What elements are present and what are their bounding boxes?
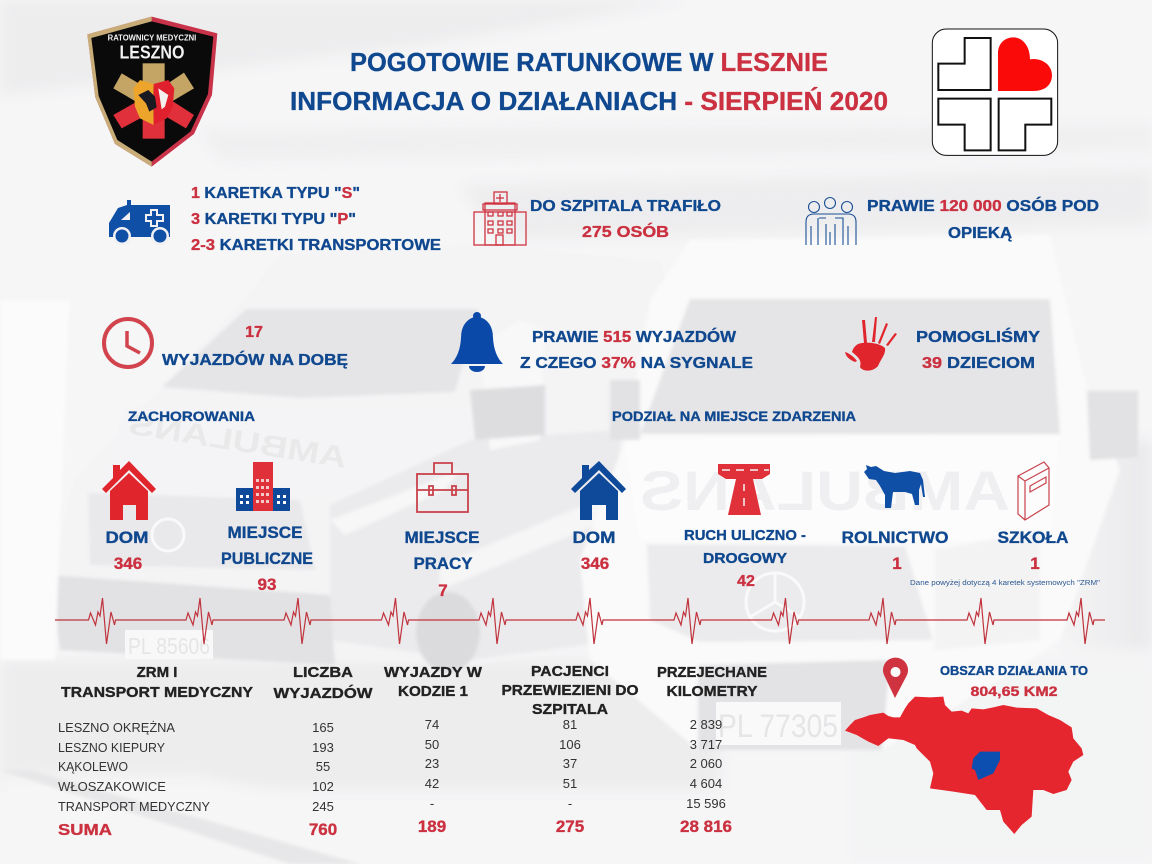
logo: Ratownicy Medyczni Leszno shield: LESZNO bbox=[119, 42, 184, 63]
stat: rolnictwo 1: 1 bbox=[892, 554, 902, 573]
column: wyjazdy w kodzie 1: 74 bbox=[425, 717, 439, 732]
logo: emergency cross with heart bbox=[932, 29, 1058, 155]
stat: dom 346 bbox=[106, 528, 148, 573]
total trips text: Z CZEGO 37% NA SYGNALE bbox=[520, 355, 753, 372]
service area text bbox=[940, 663, 1088, 699]
children helped text bbox=[916, 327, 1040, 372]
background photo: ambulances in a garage: AMBULANS bbox=[640, 459, 1010, 522]
stat: rolnictwo 1 bbox=[842, 528, 948, 573]
column: wyjazdy w kodzie 1: 42 bbox=[425, 776, 439, 791]
stat: ruch uliczno-drogowy 42 bbox=[684, 528, 806, 590]
row names: LESZNO KIEPURY bbox=[58, 740, 165, 755]
column: przejechane kilometry: 28 816 bbox=[680, 817, 732, 836]
stat: ruch uliczno-drogowy 42: 42 bbox=[737, 573, 755, 590]
column: wyjazdy w kodzie 1: - bbox=[430, 796, 434, 811]
stat: szkoła 1: SZKOŁA bbox=[998, 528, 1068, 547]
icon: group of people bbox=[806, 198, 856, 245]
row names: LESZNO OKRĘŻNA bbox=[58, 720, 175, 735]
stat: szkoła 1 bbox=[998, 528, 1068, 573]
total trips text bbox=[520, 327, 753, 372]
column headers: TRANSPORT MEDYCZNY bbox=[61, 684, 253, 701]
stat: dom 346: 346 bbox=[114, 554, 142, 573]
column: liczba wyjazdów: 760 bbox=[309, 820, 337, 839]
footnote: Dane powyżej dotyczą 4 karetek systemowych "ZRM" bbox=[910, 580, 1101, 587]
title: POGOTOWIE RATUNKOWE W LESZNIE bbox=[350, 47, 828, 77]
stat: dom 346 (incident location): DOM bbox=[572, 528, 616, 547]
trips per day text bbox=[162, 324, 348, 369]
column: przejechane kilometry: 3 717 bbox=[690, 737, 722, 752]
service area text: OBSZAR DZIAŁANIA TO bbox=[940, 663, 1088, 678]
stat: miejsce publiczne 93: MIEJSCE bbox=[228, 523, 302, 542]
column: pacjenci: 37 bbox=[563, 756, 577, 771]
column: przejechane kilometry: 4 604 bbox=[690, 776, 722, 791]
hospital text bbox=[530, 198, 721, 241]
coat of arms bbox=[133, 80, 174, 125]
children helped text: POMOGLIŚMY bbox=[916, 327, 1040, 346]
icon: red house bbox=[102, 461, 156, 520]
column headers: KILOMETRY bbox=[666, 683, 758, 700]
heading: podział na miejsce zdarzenia: PODZIAŁ NA MIEJSCE ZDARZENIA bbox=[612, 408, 856, 424]
background photo: ambulances in a garage: AMBULANS bbox=[127, 408, 349, 475]
total trips text: PRAWIE 515 WYJAZDÓW bbox=[532, 327, 737, 346]
column: liczba wyjazdów: 245 bbox=[312, 799, 334, 814]
icon: road bbox=[718, 464, 770, 515]
title: INFORMACJA O DZIAŁANIACH - SIERPIEŃ 2020 bbox=[290, 86, 888, 116]
stat: szkoła 1: 1 bbox=[1030, 554, 1040, 573]
stat: dom 346: DOM bbox=[106, 528, 148, 547]
icon: hospital bbox=[474, 192, 526, 245]
stat: dom 346 (incident location) bbox=[572, 528, 616, 573]
star of life bbox=[113, 63, 194, 139]
icon: briefcase bbox=[417, 463, 468, 512]
row names: WŁOSZAKOWICE bbox=[58, 779, 166, 794]
stat: miejsce publiczne 93: 93 bbox=[258, 575, 276, 594]
row names: KĄKOLEWO bbox=[58, 759, 128, 774]
column: pacjenci bbox=[556, 717, 584, 836]
column headers: PACJENCI bbox=[531, 663, 609, 680]
title bbox=[290, 47, 888, 116]
column headers: PRZEWIEZIENI DO bbox=[502, 682, 639, 699]
hospital text: 275 OSÓB bbox=[582, 222, 669, 241]
icon: map pin bbox=[883, 658, 908, 698]
ambulance types text: 3 KARETKI TYPU "P" bbox=[191, 211, 356, 228]
stat: miejsce pracy 7 bbox=[404, 528, 480, 600]
column headers bbox=[61, 663, 767, 718]
map: service area bbox=[845, 697, 1083, 834]
background photo: ambulances in a garage: PL 85606 bbox=[128, 633, 210, 659]
heartbeat line bbox=[55, 598, 1105, 644]
column: pacjenci: - bbox=[568, 796, 572, 811]
hospital text: DO SZPITALA TRAFIŁO bbox=[530, 198, 721, 215]
column: pacjenci: 81 bbox=[563, 717, 577, 732]
icon: clock bbox=[104, 319, 152, 367]
row names: TRANSPORT MEDYCZNY bbox=[58, 799, 210, 814]
stat: miejsce pracy 7: MIEJSCE bbox=[404, 528, 480, 547]
column: pacjenci: 106 bbox=[559, 737, 581, 752]
icon: book bbox=[1018, 462, 1049, 520]
column headers: ZRM I bbox=[137, 664, 177, 681]
stat: dom 346 (incident location): 346 bbox=[581, 554, 609, 573]
trips per day text: WYJAZDÓW NA DOBĘ bbox=[162, 350, 348, 369]
icon: ambulance bbox=[109, 200, 170, 245]
column: wyjazdy w kodzie 1: 189 bbox=[418, 817, 446, 836]
patients under care text bbox=[867, 196, 1099, 242]
patients under care text: PRAWIE 120 000 OSÓB POD bbox=[867, 196, 1099, 215]
column headers: WYJAZDÓW bbox=[274, 684, 373, 702]
stat: miejsce pracy 7: PRACY bbox=[414, 554, 473, 573]
icon: city buildings bbox=[236, 462, 290, 511]
column: liczba wyjazdów: 193 bbox=[312, 740, 334, 755]
column: przejechane kilometry: 15 596 bbox=[686, 796, 726, 811]
column headers: PRZEJECHANE bbox=[657, 664, 767, 681]
column: wyjazdy w kodzie 1: 50 bbox=[425, 737, 439, 752]
stat: ruch uliczno-drogowy 42: DROGOWY bbox=[703, 551, 787, 567]
row names bbox=[58, 720, 210, 839]
column: liczba wyjazdów: 55 bbox=[316, 759, 330, 774]
column: wyjazdy w kodzie 1 bbox=[418, 717, 446, 836]
column: liczba wyjazdów: 165 bbox=[312, 720, 334, 735]
stat: miejsce publiczne 93: PUBLICZNE bbox=[221, 549, 313, 568]
stat: rolnictwo 1: ROLNICTWO bbox=[842, 528, 948, 547]
row names: SUMA bbox=[58, 822, 113, 839]
icon: blue house bbox=[571, 461, 626, 520]
column: pacjenci: 51 bbox=[563, 776, 577, 791]
ambulance types text: 2-3 KARETKI TRANSPORTOWE bbox=[191, 237, 441, 254]
stat: ruch uliczno-drogowy 42: RUCH ULICZNO - bbox=[684, 528, 806, 544]
background photo: ambulances in a garage: PL 77305 bbox=[718, 708, 838, 744]
column: wyjazdy w kodzie 1: 23 bbox=[425, 756, 439, 771]
icon: cow bbox=[864, 465, 925, 508]
service area text: 804,65 KM2 bbox=[970, 684, 1058, 699]
column: przejechane kilometry: 2 839 bbox=[690, 717, 722, 732]
column headers: KODZIE 1 bbox=[398, 683, 468, 700]
table: ZRM statistics bbox=[58, 663, 767, 839]
stat: miejsce publiczne 93 bbox=[221, 523, 313, 594]
ambulance types text bbox=[191, 185, 441, 254]
column headers: WYJAZDY W bbox=[384, 664, 483, 681]
column headers: SZPITALA bbox=[532, 701, 608, 718]
column: pacjenci: 275 bbox=[556, 817, 584, 836]
logo: Ratownicy Medyczni Leszno shield: RATOWNICY MEDYCZNI bbox=[108, 33, 196, 42]
column: przejechane kilometry bbox=[680, 717, 732, 836]
trips per day text: 17 bbox=[245, 324, 263, 341]
logo: Ratownicy Medyczni Leszno shield bbox=[87, 17, 217, 167]
column: liczba wyjazdów bbox=[309, 720, 337, 839]
icon: bell bbox=[451, 312, 503, 372]
ambulance types text: 1 KARETKA TYPU "S" bbox=[191, 185, 360, 202]
column: przejechane kilometry: 2 060 bbox=[690, 756, 722, 771]
stat: miejsce pracy 7: 7 bbox=[438, 581, 448, 600]
icon: red hand print bbox=[845, 317, 897, 371]
patients under care text: OPIEKĄ bbox=[948, 225, 1012, 242]
children helped text: 39 DZIECIOM bbox=[922, 355, 1035, 372]
column: liczba wyjazdów: 102 bbox=[312, 779, 334, 794]
column headers: LICZBA bbox=[293, 664, 353, 681]
heading: zachorowania: ZACHOROWANIA bbox=[128, 408, 255, 424]
